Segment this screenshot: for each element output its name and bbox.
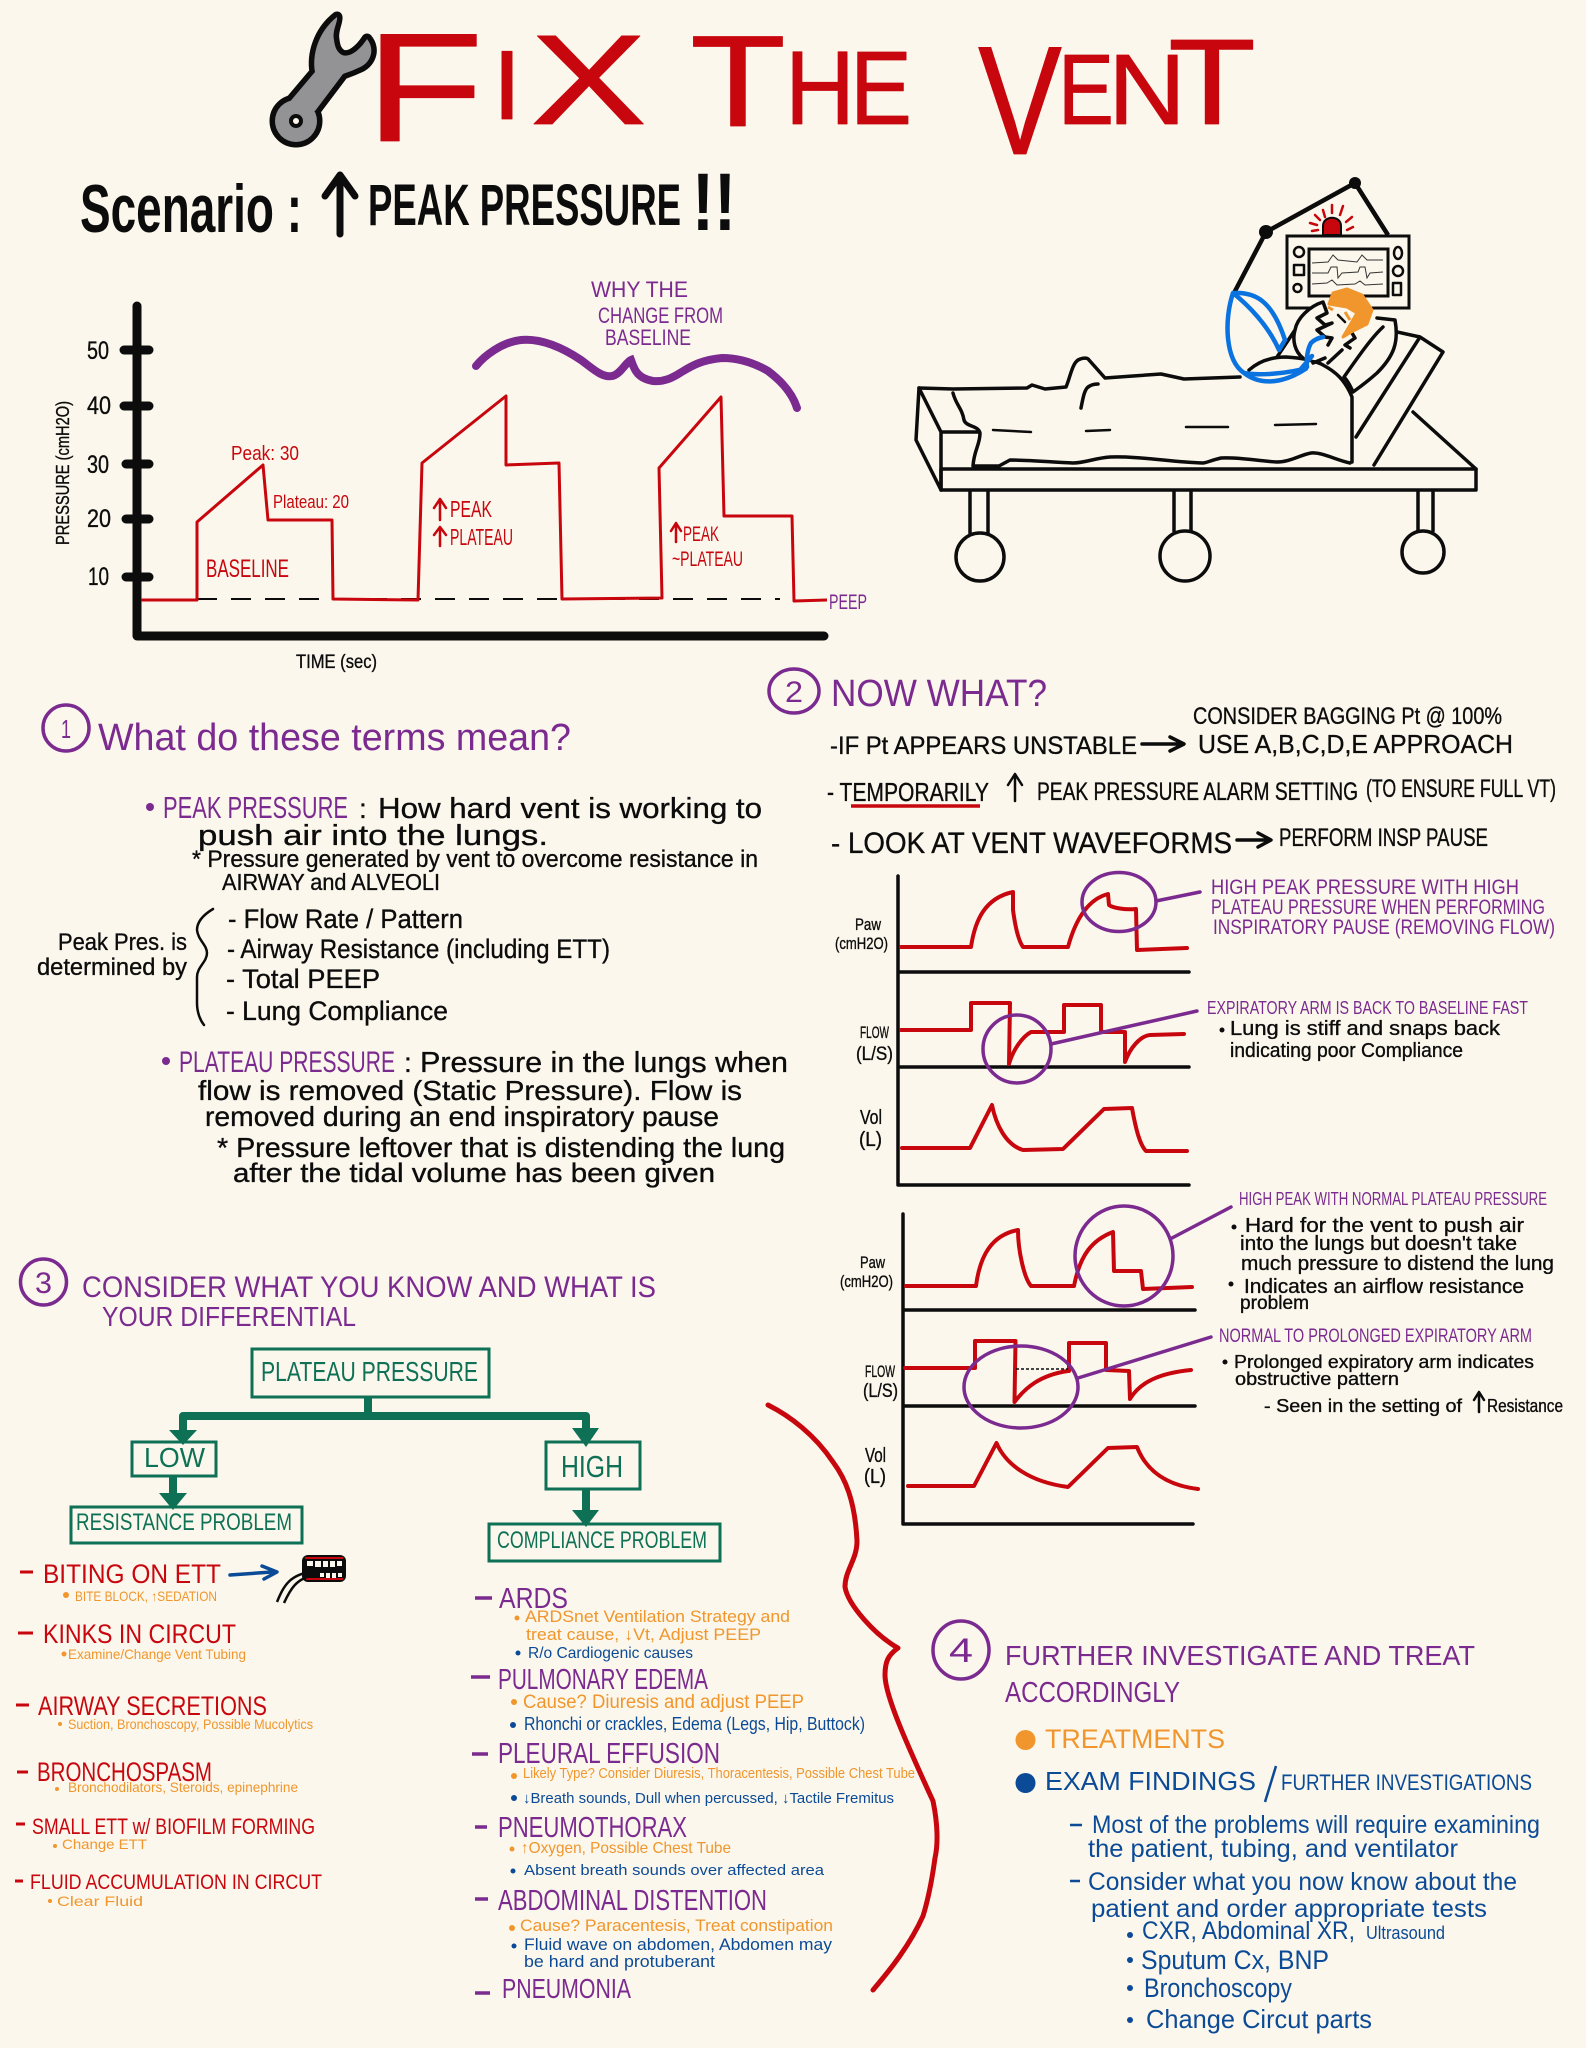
text: high peak high plateau explanation [1211, 876, 1555, 939]
icon: patient head [1277, 289, 1372, 363]
text: peak pressure determinants: Peak Pres. is [58, 929, 187, 956]
callout: why the change from baseline: CHANGE FROM [598, 303, 723, 328]
list: compliance problems: Cause? Diuresis and adjust PEEP [523, 1692, 804, 1713]
text: plateau pressure definition: Pressure in the lungs when [420, 1047, 788, 1079]
text: action steps: PERFORM INSP PAUSE [1279, 824, 1488, 852]
title: V [978, 14, 1062, 187]
text: peak pressure determinants [37, 904, 610, 1026]
chart: waveforms high peak and high plateau [835, 872, 1200, 1185]
list: compliance problems: PLEURAL EFFUSION [498, 1738, 720, 1770]
chart: waveforms high peak normal plateau: (L) [864, 1466, 886, 1488]
flowchart: plateau pressure decision tree: LOW [144, 1442, 206, 1473]
text: plateau pressure definition: : [404, 1047, 412, 1078]
list: compliance problems: ↑Oxygen, Possible Chest Tube [521, 1840, 731, 1857]
title: E [850, 30, 912, 147]
badge: number 4: 4 [949, 1632, 973, 1670]
chart: pressure over time: BASELINE [206, 555, 289, 583]
scenario heading: !! [692, 157, 736, 248]
chart: waveforms high peak and high plateau: (cmH2O) [835, 934, 888, 953]
flowchart: plateau pressure decision tree [71, 1349, 720, 1561]
text: investigations list: Ultrasound [1366, 1923, 1445, 1943]
text: prolonged expiratory arm explanation: - Seen in the setting of [1264, 1396, 1463, 1416]
icon: pillow [1344, 318, 1396, 392]
text: investigations list: patient and order appropriate tests [1091, 1895, 1487, 1923]
icon: alarm light [1310, 205, 1353, 235]
list: compliance problems: ARDS [499, 1583, 568, 1615]
list: resistance problems: Bronchodilators, Steroids, epinephrine [68, 1779, 298, 1795]
chart: waveforms high peak and high plateau: Paw [855, 915, 882, 934]
heading: further investigate: ACCORDINGLY [1005, 1677, 1180, 1709]
text: investigations list [1070, 1811, 1540, 2034]
scenario heading [80, 157, 736, 248]
flowchart: plateau pressure decision tree: RESISTANCE PROBLEM [76, 1509, 292, 1536]
list: resistance problems: Examine/Change Vent Tubing [68, 1646, 246, 1662]
list: compliance problems: PNEUMOTHORAX [498, 1812, 687, 1844]
text: action steps: - TEMPORARILY [827, 777, 989, 807]
text: action steps: -IF Pt APPEARS UNSTABLE [830, 732, 1137, 760]
heading: consider what you know: CONSIDER WHAT YOU KNOW AND WHAT IS [82, 1271, 656, 1304]
text: peak pressure definition: How hard vent is working to [378, 793, 762, 825]
chart: pressure over time: PLATEAU [450, 524, 513, 550]
text: high peak normal plateau explanation: Indicates an airflow resistance [1244, 1276, 1524, 1298]
text: plateau pressure definition: removed during an end inspiratory pause [205, 1101, 719, 1132]
list: resistance problems: BITE BLOCK, ↑SEDATION [75, 1588, 217, 1604]
text: plateau pressure definition: PLATEAU PRESSURE [179, 1046, 395, 1079]
chart: pressure over time: 50 [87, 337, 109, 365]
chart: pressure over time: 30 [87, 451, 109, 479]
text: high peak normal plateau explanation [1228, 1189, 1554, 1314]
title: X [530, 9, 647, 152]
list: resistance problems: KINKS IN CIRCUT [43, 1619, 236, 1649]
chart: waveforms high peak normal plateau: Vol [865, 1445, 886, 1467]
list: compliance problems: PULMONARY EDEMA [498, 1664, 708, 1696]
badge: number 2 [769, 669, 819, 713]
text: peak pressure definition: PEAK PRESSURE [163, 790, 348, 825]
list: compliance problems: Fluid wave on abdomen, Abdomen may [524, 1935, 833, 1954]
chart: pressure over time: TIME (sec) [296, 652, 377, 673]
badge: number 3: 3 [35, 1267, 52, 1300]
chart: waveforms high peak normal plateau: Paw [860, 1253, 886, 1272]
scenario heading: Scenario : [80, 171, 302, 247]
blanket folds [993, 424, 1316, 432]
text: peak pressure definition: * Pressure generated by vent to overcome resistance in [192, 846, 758, 873]
chart: pressure over time: 10 [88, 563, 109, 591]
chart: waveforms high peak and high plateau: (L) [859, 1129, 882, 1151]
text: action steps: CONSIDER BAGGING Pt @ 100% [1193, 703, 1502, 730]
panel: section 2 now what [769, 669, 1563, 1524]
text: action steps: PEAK PRESSURE ALARM SETTING [1037, 778, 1358, 806]
text: plateau pressure definition: after the tidal volume has been given [233, 1158, 715, 1188]
list: compliance problems: Cause? Paracentesis, Treat constipation [520, 1916, 833, 1935]
legend: exam findings [1016, 1766, 1532, 1802]
text: expiratory arm fast [1207, 998, 1528, 1062]
text: high peak high plateau explanation: HIGH PEAK PRESSURE WITH HIGH [1211, 876, 1519, 899]
list: resistance problems: FLUID ACCUMULATION IN CIRCUT [30, 1871, 322, 1894]
heading: now what: NOW WHAT? [831, 673, 1047, 715]
text: plateau pressure definition: * Pressure leftover that is distending the lung [217, 1132, 785, 1163]
text: peak pressure determinants: - Total PEEP [226, 964, 380, 994]
text: peak pressure determinants: - Airway Resistance (including ETT) [227, 934, 610, 964]
heading: further investigate [1005, 1640, 1475, 1709]
callout: why the change from baseline: WHY THE [591, 277, 688, 302]
list: compliance problems: Absent breath sounds over affected area [524, 1862, 825, 1879]
text: peak pressure definition: AIRWAY and ALVEOLI [222, 869, 440, 895]
callout: why the change from baseline: BASELINE [605, 325, 691, 350]
text: plateau pressure definition [162, 1046, 788, 1188]
list: compliance problems: Likely Type? Consider Diuresis, Thoracentesis, Possible Chest Tube [523, 1765, 915, 1782]
chart: pressure over time [53, 306, 867, 673]
text: prolonged expiratory arm explanation: Prolonged expiratory arm indicates [1234, 1352, 1534, 1372]
icon: wrench [275, 17, 371, 142]
legend: treatments: TREATMENTS [1045, 1724, 1225, 1754]
list: compliance problems: PNEUMONIA [502, 1973, 631, 2004]
legend: exam findings: FURTHER INVESTIGATIONS [1281, 1770, 1532, 1795]
chart: pressure over time: 40 [87, 392, 111, 420]
icon: breathing tubes [1228, 293, 1323, 381]
list: resistance problems: Change ETT [62, 1836, 147, 1852]
title: T [1168, 14, 1256, 150]
chart: waveforms high peak normal plateau: (L/S) [863, 1381, 898, 1402]
list: compliance problems: treat cause, ↓Vt, Adjust PEEP [526, 1625, 761, 1644]
heading: consider what you know: YOUR DIFFERENTIAL [102, 1301, 356, 1332]
flowchart: plateau pressure decision tree: PLATEAU PRESSURE [261, 1356, 478, 1387]
text: investigations list: the patient, tubing, and ventilator [1088, 1835, 1458, 1863]
list: resistance problems: AIRWAY SECRETIONS [38, 1691, 267, 1721]
chart: pressure over time: 20 [87, 505, 111, 533]
list: compliance problems: ↓Breath sounds, Dull when percussed, ↓Tactile Fremitus [523, 1790, 894, 1807]
list: compliance problems: ABDOMINAL DISTENTION [498, 1885, 767, 1917]
text: expiratory arm fast: indicating poor Compliance [1230, 1040, 1463, 1062]
list: compliance problems: be hard and protuberant [524, 1952, 715, 1971]
text: action steps [827, 703, 1556, 860]
icon: ventilator arm [1234, 177, 1388, 293]
badge: number 2: 2 [785, 676, 803, 709]
badge: number 1 [43, 705, 89, 751]
text: prolonged expiratory arm explanation [1219, 1326, 1563, 1416]
chart: waveforms high peak normal plateau: FLOW [865, 1362, 895, 1381]
text: action steps: - LOOK AT VENT WAVEFORMS [831, 827, 1232, 860]
text: peak pressure determinants: - Lung Compliance [226, 996, 448, 1026]
title: I [492, 30, 522, 140]
heading: consider what you know [82, 1271, 656, 1332]
list: compliance problems [471, 1583, 915, 2004]
text: plateau pressure definition: flow is removed (Static Pressure). Flow is [198, 1075, 742, 1106]
text: prolonged expiratory arm explanation: obstructive pattern [1235, 1369, 1399, 1389]
list: resistance problems: SMALL ETT w/ BIOFILM FORMING [32, 1814, 315, 1839]
badge: number 1: 1 [61, 714, 71, 744]
text: high peak normal plateau explanation: into the lungs but doesn't take [1240, 1233, 1517, 1255]
chart: pressure over time: PEAK [683, 523, 719, 546]
text: investigations list: Consider what you now know about the [1088, 1868, 1517, 1896]
text: peak pressure definition: : [359, 793, 367, 824]
flowchart: plateau pressure decision tree: COMPLIANCE PROBLEM [497, 1527, 707, 1554]
chart: pressure over time: ~PLATEAU [672, 548, 743, 571]
heading: what do these terms mean: What do these terms mean? [98, 717, 571, 759]
list: resistance problems: BRONCHOSPASM [37, 1757, 212, 1787]
chart: pressure over time: Peak: 30 [231, 443, 299, 465]
text: investigations list: Most of the problems will require examining [1092, 1811, 1540, 1839]
list: compliance problems: Rhonchi or crackles, Edema (Legs, Hip, Buttock) [524, 1714, 865, 1734]
chart: waveforms high peak and high plateau: FLOW [860, 1023, 889, 1042]
heading: further investigate: FURTHER INVESTIGATE AND TREAT [1005, 1640, 1475, 1671]
chart: pressure over time: PEAK [450, 496, 492, 522]
text: prolonged expiratory arm explanation: Resistance [1487, 1396, 1563, 1416]
icon: ventilator monitor [1287, 236, 1409, 308]
list: compliance problems: ARDSnet Ventilation Strategy and [525, 1607, 790, 1626]
text: high peak normal plateau explanation: problem [1240, 1293, 1309, 1314]
list: resistance problems: BITING ON ETT [43, 1559, 221, 1589]
title: E [1058, 34, 1114, 146]
text: high peak normal plateau explanation: Hard for the vent to push air [1245, 1215, 1524, 1237]
chart: pressure over time: Plateau: 20 [273, 492, 349, 512]
badge: number 4 [933, 1621, 989, 1679]
chart: waveforms high peak and high plateau: Vol [860, 1107, 882, 1129]
list: resistance problems: Suction, Bronchoscopy, Possible Mucolytics [68, 1716, 313, 1732]
title [365, 1, 1256, 187]
illustration: patient on ventilator in bed [916, 177, 1476, 581]
bracket: red grouping curve [768, 1405, 937, 1990]
panel: section 3 differential [15, 1259, 915, 2004]
icon: bed frame [916, 332, 1476, 581]
text: peak pressure determinants: determined by [37, 954, 187, 981]
scenario heading: PEAK PRESSURE [368, 173, 681, 238]
title: F [365, 1, 484, 174]
text: investigations list: Change Circut parts [1146, 2004, 1372, 2034]
callout: why the change from baseline [476, 277, 797, 408]
panel: section 4 investigate and treat [933, 1621, 1540, 2034]
icon: blanket [919, 357, 1352, 466]
chart: waveforms high peak and high plateau: (L/S) [856, 1044, 893, 1065]
text: investigations list: CXR, Abdominal XR, [1142, 1917, 1355, 1945]
text: investigations list: Bronchoscopy [1144, 1973, 1292, 2003]
arrow: to biting illustration [230, 1566, 277, 1579]
title: T [690, 8, 786, 154]
chart: pressure over time: PRESSURE (cmH2O) [53, 401, 73, 545]
list: compliance problems: R/o Cardiogenic causes [528, 1645, 693, 1662]
badge: number 3 [20, 1259, 66, 1305]
text: peak pressure determinants: - Flow Rate / Pattern [228, 904, 463, 934]
icon: mouth biting tube [277, 1555, 346, 1603]
panel: section 1 terms [37, 705, 788, 1188]
text: high peak normal plateau explanation: much pressure to distend the lung [1241, 1253, 1554, 1275]
flowchart: plateau pressure decision tree: HIGH [561, 1449, 623, 1484]
chart: pressure over time: PEEP [829, 591, 867, 614]
text: peak pressure definition [146, 790, 762, 895]
list: resistance problems: Clear Fluid [57, 1893, 143, 1909]
title: N [1108, 34, 1186, 146]
legend: exam findings: EXAM FINDINGS [1045, 1766, 1256, 1796]
list: resistance problems [15, 1559, 322, 1909]
chart: waveforms high peak normal plateau [840, 1206, 1231, 1524]
text: investigations list: Sputum Cx, BNP [1141, 1945, 1329, 1975]
text: action steps: USE A,B,C,D,E APPROACH [1198, 729, 1513, 759]
title: H [785, 30, 855, 147]
text: peak pressure definition: push air into the lungs. [198, 820, 548, 852]
text: expiratory arm fast: Lung is stiff and snaps back [1230, 1018, 1501, 1040]
chart: waveforms high peak normal plateau: (cmH2O) [840, 1272, 893, 1291]
